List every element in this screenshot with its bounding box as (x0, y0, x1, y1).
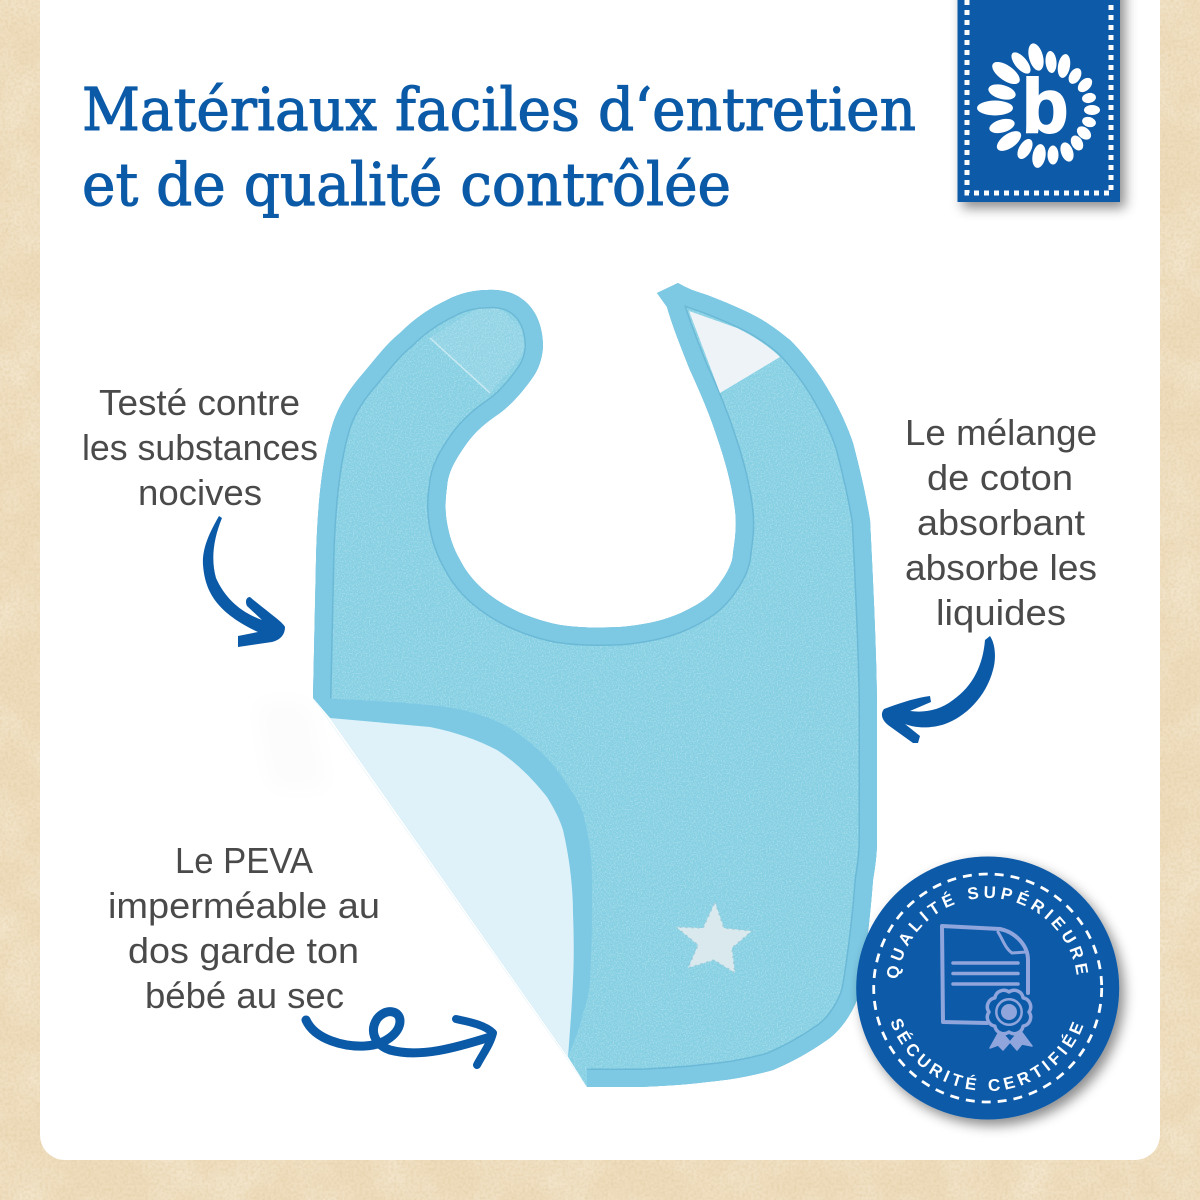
arrow: to left edge (203, 516, 285, 647)
faint shadow under fold (255, 700, 330, 790)
dashed ring (874, 874, 1102, 1102)
binding (313, 283, 877, 1087)
title (82, 75, 916, 219)
text: cotton: absorbe les (905, 547, 1097, 588)
text: PEVA: Le PEVA (175, 840, 313, 881)
arrow: looped to PEVA (306, 1012, 493, 1065)
quality badge (854, 854, 1132, 1134)
logo flower (977, 42, 1100, 169)
text: cotton: Le mélange (905, 412, 1097, 453)
badge text bottom: SÉCURITÉ CERTIFIÉE (891, 1018, 1084, 1091)
text: tested: nocives (138, 472, 262, 513)
velcro patch (689, 311, 780, 393)
text: cotton (905, 412, 1097, 633)
bib (300, 270, 900, 1100)
badge disc (856, 856, 1119, 1120)
arrow: to right edge (882, 636, 995, 743)
folded corner: PEVA back (313, 698, 592, 1087)
title: Matériaux faciles d‘entretien (82, 75, 916, 144)
terry cloth (300, 270, 900, 1100)
brand tag (958, 0, 1120, 202)
badge text top: QUALITÉ SUPÉRIEURE (887, 886, 1088, 978)
text: tested (82, 382, 318, 513)
stitching (967, 0, 1111, 193)
tag ribbon (958, 0, 1120, 202)
binding seam (313, 283, 877, 1087)
text: tested: les substances (82, 427, 318, 468)
text: cotton: liquides (936, 592, 1066, 633)
title: et de qualité contrôlée (82, 150, 731, 219)
embroidered star (676, 902, 752, 973)
text: tested: Testé contre (99, 382, 300, 423)
text: cotton: de coton (927, 457, 1073, 498)
text: PEVA: dos garde ton (128, 930, 359, 971)
text: PEVA: bébé au sec (145, 975, 344, 1016)
text: cotton: absorbant (917, 502, 1085, 543)
logo letter: b (1022, 64, 1068, 149)
icon: certificate (942, 926, 1032, 1050)
text: PEVA (108, 840, 380, 1016)
text: PEVA: imperméable au (108, 885, 380, 926)
